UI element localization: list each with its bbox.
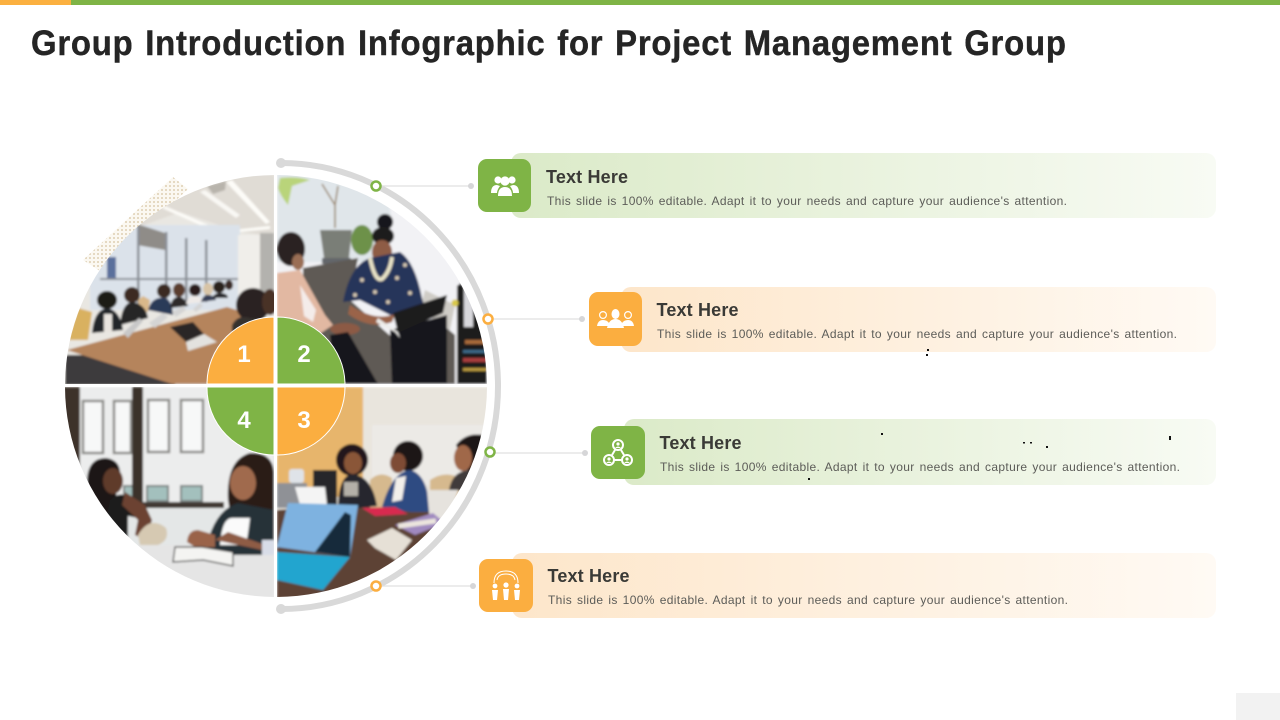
heading: Text Here <box>546 167 628 187</box>
title: Group Introduction Infographic for Project Management Group <box>31 24 1066 63</box>
connector 2 <box>484 314 585 324</box>
corner tab <box>1236 693 1280 720</box>
heading: Text Here <box>656 300 738 320</box>
heading: Text Here <box>548 566 630 586</box>
panel: photo circle <box>60 170 490 602</box>
quadrant 2: 2 <box>297 341 311 368</box>
stray specks <box>808 349 1171 480</box>
photo: two women talking by a window <box>60 387 276 602</box>
panel: item 2 <box>589 287 1216 352</box>
outer arc ring <box>276 158 498 614</box>
dotted decorative band <box>83 177 188 271</box>
description: This slide is 100% editable. Adapt it to your needs and capture your audience's attention. <box>657 327 1177 341</box>
top accent bar <box>0 0 1280 5</box>
connector 1 <box>372 182 474 190</box>
connector 3 <box>486 448 588 456</box>
icon: group of people <box>478 159 531 212</box>
connector 4 <box>372 582 476 590</box>
icon: team members <box>589 292 642 346</box>
icon: connected people network <box>591 426 645 479</box>
panel: item 3 <box>591 419 1216 485</box>
quadrant 1: 1 <box>237 341 251 368</box>
quadrant 3 <box>277 387 345 455</box>
quadrant 4 <box>207 387 274 455</box>
quadrant 1 <box>207 317 274 384</box>
quadrant 3: 3 <box>297 407 311 434</box>
heading: Text Here <box>660 433 742 453</box>
photo: three women at a table with a tablet <box>277 387 490 600</box>
description: This slide is 100% editable. Adapt it to your needs and capture your audience's attention. <box>548 593 1068 607</box>
photo: two women on a sofa with a laptop <box>277 170 489 386</box>
quadrant 2 <box>277 317 345 384</box>
photo: team around a conference table <box>60 170 278 386</box>
panel: item 1 <box>478 153 1216 218</box>
icon: people under arcs <box>479 559 533 612</box>
panel: item 4 <box>479 553 1216 618</box>
description: This slide is 100% editable. Adapt it to your needs and capture your audience's attention. <box>660 460 1180 474</box>
quadrant 4: 4 <box>237 407 251 434</box>
description: This slide is 100% editable. Adapt it to your needs and capture your audience's attention. <box>547 194 1067 208</box>
